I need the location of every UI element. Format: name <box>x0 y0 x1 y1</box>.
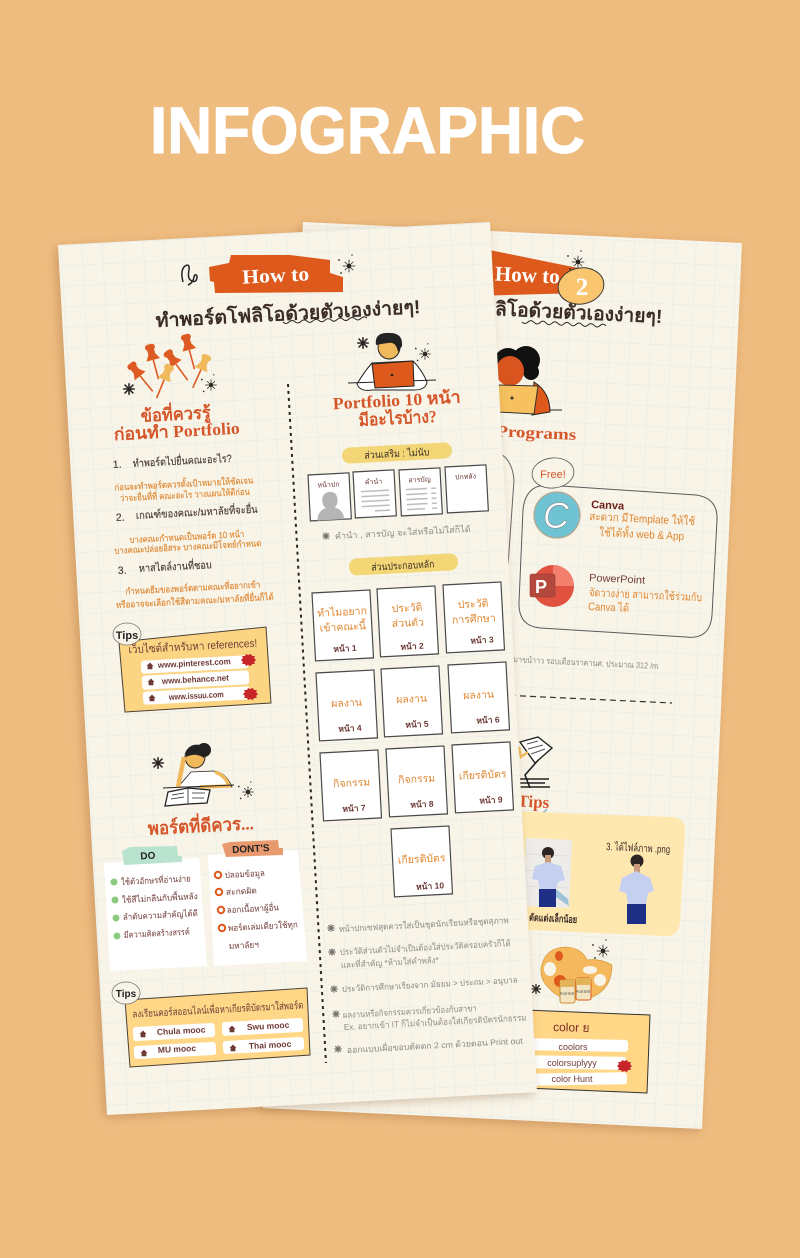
card: page 6: ผลงาน <box>463 689 494 702</box>
list: step 1: 1. <box>113 459 122 471</box>
card: page 2: ประวัติ <box>391 602 423 615</box>
list: do items: ใช้ตัวอักษรที่อ่านง่าย <box>121 872 191 887</box>
links: courses <box>133 1018 304 1059</box>
heading: references: เว็บไซต์สำหรับหา references! <box>128 636 258 656</box>
list: step 2: เกณฑ์ของคณะ/มหาลัยที่จะยื่น <box>135 502 258 522</box>
list: don't items <box>215 868 298 951</box>
card: page 7: กิจกรรม <box>333 776 370 790</box>
list: step 1 <box>113 451 254 503</box>
list: don't items: ปลอมข้อมูล <box>225 868 265 881</box>
icon: powerpoint <box>530 565 574 607</box>
links: color tools: color Hunt <box>551 1074 593 1084</box>
links: references: www.issuu.com <box>168 689 224 702</box>
card: page 3: ประวัติ <box>457 598 489 611</box>
text: powerpoint <box>588 572 702 615</box>
list: step 2 <box>114 502 262 556</box>
links: references: www.pinterest.com <box>157 656 231 670</box>
panel: online course tips <box>112 982 310 1067</box>
list: do items: มีความคิดสร้างสรรค์ <box>124 927 190 940</box>
icon: woman with laptop <box>494 346 562 415</box>
text: canva: Canva <box>591 499 625 513</box>
card: page 9: เกียรติบัตร <box>458 767 507 783</box>
cards: optional pages <box>308 465 488 521</box>
divider: dotted column line <box>288 384 326 1063</box>
banner: How to <box>182 254 355 293</box>
caption: step 2: ตัดแต่งเล็กน้อย <box>529 910 578 926</box>
text: canva: ใช้ได้ทั้ง web & App <box>599 524 684 543</box>
card: page 3: การศึกษา <box>452 612 496 627</box>
card: back cover <box>445 465 488 513</box>
pill: optional section: ส่วนเสริม : ไม่นับ <box>364 446 430 462</box>
list: step 1: ทำพอร์ตไปยื่นคณะอะไร? <box>132 451 232 470</box>
card: page 6: หน้า 6 <box>476 714 500 726</box>
banner: How to 2 <box>470 246 607 308</box>
card: page 8 <box>386 746 447 817</box>
notes: design hints: ประวัติส่วนตัวไม่จำเป็นต้องใส่ประวัติครอบครัวก็ได้ <box>340 937 511 957</box>
notes: design hints: Ex. อยากเข้า IT ก็ไม่จำเป็นต้องใส่เกียรติบัตรนักธรรม <box>344 1011 527 1032</box>
panel: png tips <box>480 810 685 936</box>
tag: tips: Tips <box>116 989 137 1000</box>
icon: canva: C <box>543 495 570 536</box>
icon: canva <box>534 492 580 538</box>
card: contents: สารบัญ <box>408 475 431 485</box>
notes: design hints: ผลงานหรือกิจกรรมควรเกี่ยวข้องกับสาขา <box>343 1002 477 1020</box>
icon: palette: POSTER <box>560 992 575 996</box>
card: page 5 <box>381 666 442 737</box>
title: INFOGRAPHIC <box>150 93 585 167</box>
panel: don't <box>208 840 307 966</box>
list: do items: ใช้สีไม่กลืนกับพื้นหลัง <box>122 890 198 905</box>
pill: main section <box>349 553 458 576</box>
list: step 3: กำหนดธีมของพอร์ตตามคณะที่อยากเข้า <box>125 577 261 597</box>
list: step 1: ก่อนจะทำพอร์ตควรตั้งเป้าหมายให้ชัดเจน <box>114 473 254 493</box>
sheet paper right <box>263 222 742 1129</box>
links: references <box>141 654 258 705</box>
heading: portfolio 10 pages: มีอะไรบ้าง? <box>358 406 437 430</box>
heading: online course: ลงเรียนคอร์สออนไลน์เพื่อหาเกียรติบัตรมาใส่พอร์ต <box>132 998 304 1020</box>
text: powerpoint: Canva ได้ <box>588 600 629 615</box>
pill: main section: ส่วนประกอบหลัก <box>371 559 435 574</box>
list: step 3: หาสไตล์งานที่ชอบ <box>138 557 212 575</box>
frame: paid programs partly hidden <box>490 450 514 580</box>
tag: tips <box>113 623 141 645</box>
panel: free programs <box>519 456 717 637</box>
heading: portfolio 10 pages <box>332 388 461 430</box>
text: powerpoint: จัดวางง่าย สามารถใช้ร่วมกับ <box>589 586 702 604</box>
card: page 1: หน้า 1 <box>333 643 357 654</box>
heading: right sheet subtitle: ทำพอร์ตโฟลิโอด้วยตัวเองง่ายๆ! <box>400 293 663 328</box>
links: color tools <box>520 1038 632 1086</box>
card: page 6 <box>448 662 509 733</box>
icon: palette: POSTER <box>576 990 591 994</box>
sheet paper left <box>58 222 537 1115</box>
card: page 4 <box>316 670 377 741</box>
panel: left sheet How to <box>58 222 537 1115</box>
panel: color websites <box>520 1010 650 1093</box>
card: page 3 <box>443 582 504 653</box>
heading: Programs: Programs <box>496 423 577 444</box>
list: do items <box>110 872 198 940</box>
list: step 1: ว่าจะยื่นที่ที่ คณะอะไร วางแผนให้ดีก่อน <box>120 485 250 503</box>
list: don't items: สะกดผิด <box>226 885 257 897</box>
panel: references tips <box>113 623 271 712</box>
card: page 4: ผลงาน <box>331 697 362 710</box>
heading: things to know: ข้อที่ควรรู้ <box>140 400 212 428</box>
tape: don't: DONT'S <box>232 843 270 856</box>
frame outline <box>519 485 717 637</box>
list: step 3: หรืออาจจะเลือกใช้สีตามคณะ/มหาลัยที่ยื่นก็ได้ <box>116 590 274 610</box>
card: page 2: ส่วนตัว <box>391 617 424 630</box>
list: step 2: บางคณะปล่อยอิสระ บางคณะมีโจทย์กำหนด <box>114 537 262 556</box>
card: preface: คำนำ <box>365 477 382 486</box>
tag: tips <box>112 982 140 1004</box>
card: back cover: ปกหลัง <box>455 472 476 481</box>
list: step 3: 3. <box>118 565 127 577</box>
star: palette <box>532 984 540 994</box>
note: subscription price: มาขนำาว รอบเดือนราคานศ. ประมาณ 312 /m <box>513 654 658 671</box>
list: step 3 <box>116 557 274 610</box>
icon: push pins <box>124 333 216 401</box>
card: preface <box>353 470 396 518</box>
list: don't items: ลอกเนื้อหาผู้อื่น <box>227 901 279 916</box>
notes: design hints: ประวัติการศึกษาเรียงจาก มัธยม > ประถม > อนุบาล <box>342 975 518 995</box>
card: front cover <box>308 473 351 521</box>
heading: good portfolio: พอร์ตที่ดีควร... <box>147 810 254 839</box>
list: step 2: บางคณะกำหนดเป็นพอร์ต 10 หน้า <box>129 527 245 545</box>
card: page 4: หน้า 4 <box>338 723 362 734</box>
list: don't items: มหาลัยฯ <box>229 939 259 951</box>
card: page 1: ทำไมอยาก <box>317 604 367 620</box>
photo: student png <box>619 854 654 924</box>
icon: student reading <box>153 743 254 806</box>
heading: left sheet subtitle: ทำพอร์ตโฟลิโอด้วยตัวเองง่ายๆ! <box>155 295 421 332</box>
list: do items: ลำดับความสำคัญได้ดี <box>123 908 198 922</box>
card: page 10: หน้า 10 <box>416 880 445 892</box>
notes: design hints: และที่สำคัญ *ห้ามใส่คำพลัง* <box>341 954 440 970</box>
banner: How to 2: 2 <box>576 274 588 301</box>
text: canva: สะดวก มีTemplate ให้ใช้ <box>589 510 695 528</box>
card: page 10: เกียรติบัตร <box>397 851 446 867</box>
icon: powerpoint: P <box>535 577 547 597</box>
tape: do: DO <box>140 851 156 862</box>
text: canva <box>589 499 695 543</box>
card: page 9: หน้า 9 <box>479 794 503 806</box>
icon: palette <box>541 947 612 1003</box>
heading: things to know <box>113 400 240 444</box>
card: page 7 <box>320 750 381 821</box>
tag: tips: Tips <box>116 630 138 642</box>
heading: color: color ย <box>553 1020 590 1035</box>
notes: design hints: ออกแบบเผื่อขอบตัดตก 2 cm ด้วยตอน Print out <box>347 1035 524 1055</box>
caption: step 3: 3. ได้ไฟล์ภาพ .png <box>606 840 671 856</box>
links: courses: Chula mooc <box>157 1024 206 1037</box>
links: courses: MU mooc <box>158 1043 197 1055</box>
note: optional caption: คำนำ , สารบัญ จะใส่หรือไม่ใส่ก็ได้ <box>335 523 471 541</box>
card: page 3: หน้า 3 <box>470 634 494 646</box>
links: references: www.behance.net <box>161 672 229 686</box>
list: don't items: พอร์ตเล่มเดียวใช้ทุก <box>228 919 298 934</box>
card: page 2 <box>377 586 438 657</box>
list: step 2: 2. <box>116 512 125 524</box>
divider dashed <box>480 694 672 703</box>
links: courses: Swu mooc <box>247 1020 290 1032</box>
card: page 1: เข้าคณะนี้ <box>319 618 367 635</box>
card: page 5: หน้า 5 <box>405 719 429 730</box>
card: page 9 <box>452 742 513 813</box>
links: color tools: colorsuplyyy <box>547 1058 597 1068</box>
card: front cover: หน้าปก <box>317 480 340 490</box>
tag: free <box>531 456 575 490</box>
cards: main pages <box>312 582 513 897</box>
banner: How to: How to <box>242 263 310 289</box>
card: page 8: หน้า 8 <box>410 799 434 810</box>
heading: portfolio 10 pages: Portfolio 10 หน้า <box>332 388 461 413</box>
card: page 10 <box>391 826 452 897</box>
icon: lamp document <box>510 737 552 788</box>
banner: How to 2: How to <box>494 261 560 289</box>
card: page 2: หน้า 2 <box>400 641 424 652</box>
text: powerpoint: PowerPoint <box>589 572 645 587</box>
notes: design hints: หน้าปกเซฟสุดควรใส่เป็นชุดนักเรียนหรือชุดสุภาพ <box>339 914 509 935</box>
icon: man with laptop <box>348 333 436 390</box>
card: page 5: ผลงาน <box>396 693 427 706</box>
sparkle: palette <box>592 939 609 959</box>
pill: optional section <box>342 442 452 464</box>
photo: cut out background <box>522 838 572 908</box>
card: page 8: กิจกรรม <box>398 772 435 786</box>
panel: right sheet How to 2 <box>263 222 742 1129</box>
heading: Tips right sheet: Tips <box>517 792 550 812</box>
card: contents <box>399 468 442 516</box>
links: courses: Thai mooc <box>249 1039 292 1051</box>
tag: free: Free! <box>540 469 566 481</box>
notes: design hints <box>328 914 527 1055</box>
card: page 7: หน้า 7 <box>342 803 366 814</box>
card: page 1 <box>312 590 373 661</box>
panel: do <box>104 846 207 971</box>
heading: things to know: ก่อนทำ Portfolio <box>113 419 240 444</box>
links: color tools: coolors <box>558 1042 588 1052</box>
